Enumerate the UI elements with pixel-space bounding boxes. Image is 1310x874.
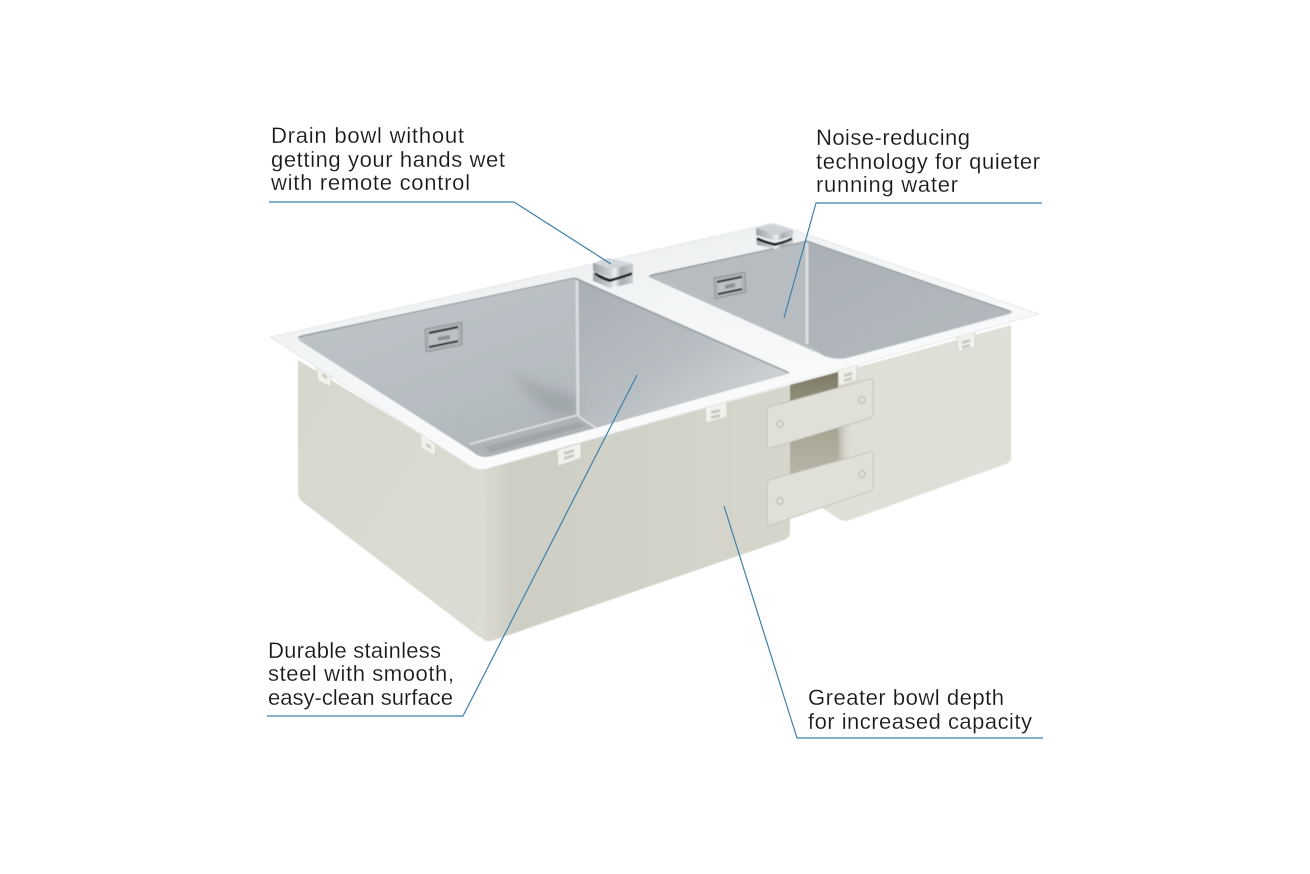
callout text xyxy=(816,125,1040,197)
callout text xyxy=(270,123,505,195)
callout text: with remote control xyxy=(270,170,470,195)
mounting brackets xyxy=(767,379,873,525)
callout: remote control drain xyxy=(269,123,611,264)
leader line xyxy=(784,203,1042,318)
leader line xyxy=(724,506,1043,738)
callout text: technology for quieter xyxy=(816,149,1040,174)
callout: durable steel xyxy=(267,375,637,716)
callout text xyxy=(808,685,1032,734)
left bowl xyxy=(298,278,789,457)
shaded gap between housings xyxy=(790,372,838,512)
overflow logo plate xyxy=(425,322,462,352)
callout text: steel with smooth, xyxy=(268,661,454,686)
sink product illustration xyxy=(270,224,1039,641)
leader line xyxy=(267,375,637,716)
callout text xyxy=(268,638,454,710)
leader line xyxy=(269,202,611,264)
remote control knob: left xyxy=(593,258,633,288)
callout text: Greater bowl depth xyxy=(808,685,1004,710)
callout: bowl depth xyxy=(724,506,1043,738)
bowl floor xyxy=(468,418,596,457)
callout text: easy-clean surface xyxy=(268,685,453,710)
remote control knob: right xyxy=(756,224,793,249)
stainless steel flange xyxy=(270,224,1039,470)
corner shadow xyxy=(510,375,578,418)
callout text: Drain bowl without xyxy=(271,123,464,148)
callout text: getting your hands wet xyxy=(271,147,505,172)
right bowl xyxy=(649,241,1012,359)
overflow logo plate xyxy=(714,272,746,299)
left bowl housing xyxy=(298,360,790,641)
callout text: running water xyxy=(816,172,958,197)
callout text: Durable stainless xyxy=(268,638,441,663)
right bowl housing xyxy=(790,325,1011,521)
callout text: Noise-reducing xyxy=(816,125,970,150)
callout text: for increased capacity xyxy=(808,709,1032,734)
mounting clips xyxy=(316,331,975,466)
callout: noise reduction xyxy=(784,125,1042,318)
